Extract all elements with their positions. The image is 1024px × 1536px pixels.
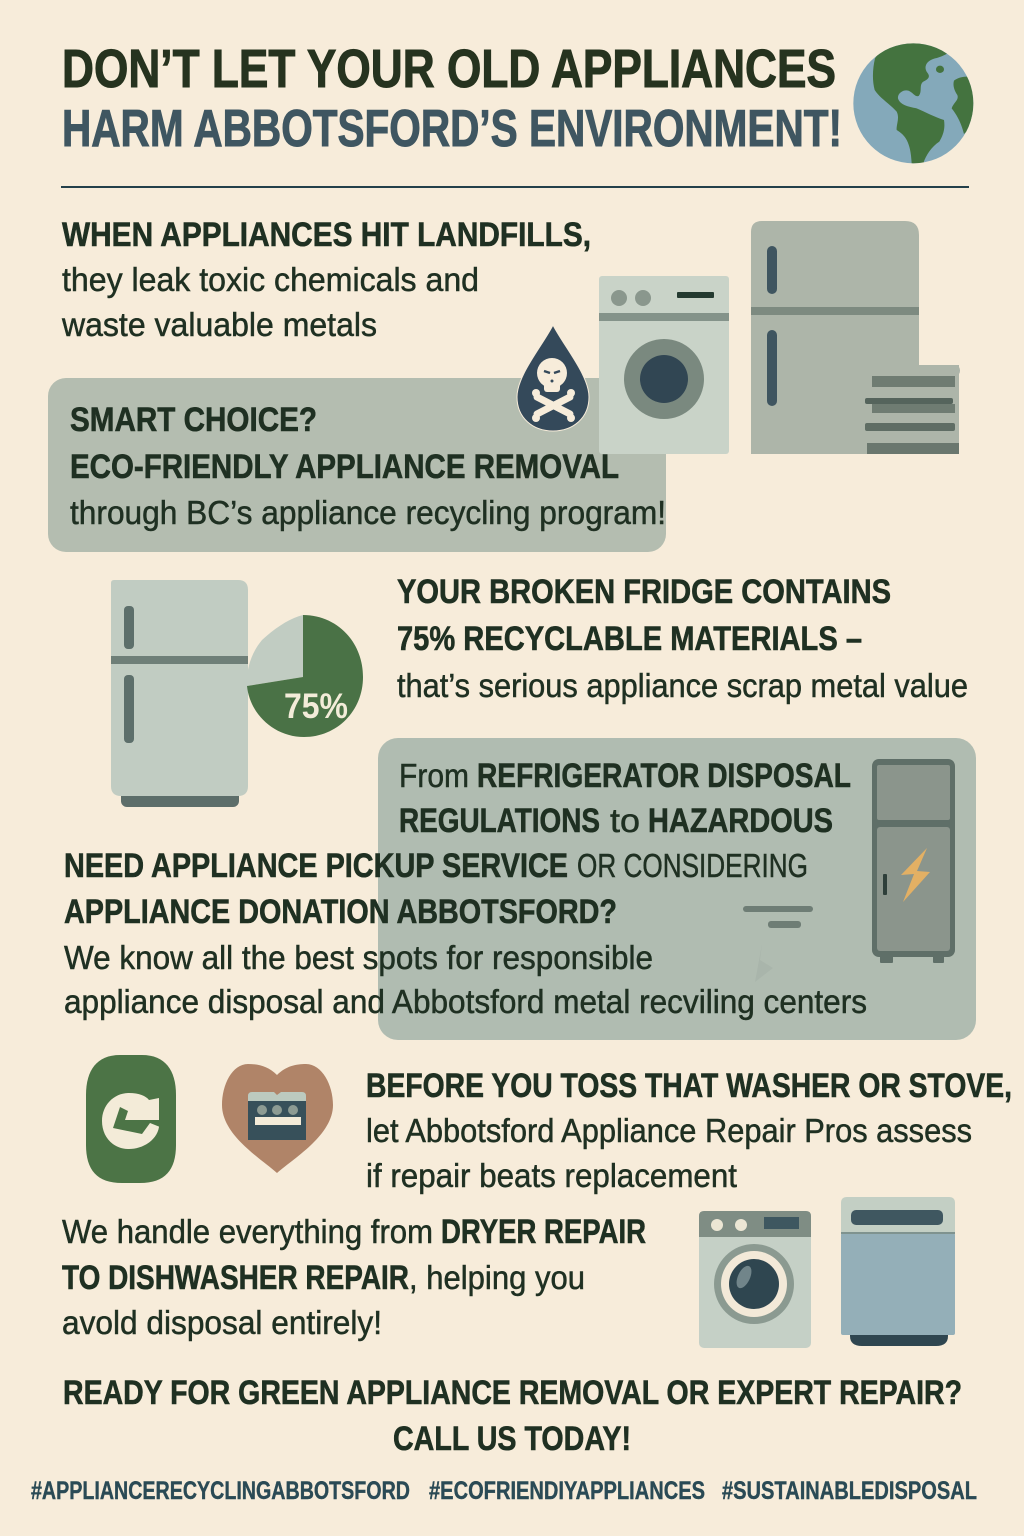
hashtags (31, 1477, 977, 1505)
icon: recycle (86, 1055, 176, 1183)
title: DON’T LET YOUR OLD APPLIANCES (62, 39, 836, 99)
text: we handle everything: avold disposal entirely! (62, 1304, 382, 1341)
call to action (63, 1374, 962, 1458)
text: pickup service: NEED APPLIANCE PICKUP SERVICE (64, 847, 568, 885)
text: smart choice: SMART CHOICE? (70, 401, 317, 439)
chart: 75% pie (247, 615, 363, 737)
divider (61, 186, 969, 188)
text: pickup service: We know all the best spots for responsible (64, 939, 653, 976)
title (62, 39, 842, 158)
text: recyclable materials: that’s serious appliance scrap metal value (397, 667, 968, 704)
hashtags: #ECOFRIENDIYAPPLIANCES (429, 1477, 705, 1505)
icon: fridge with stack of scrap (751, 221, 960, 454)
text: regulations (399, 757, 851, 840)
text: landfills: WHEN APPLIANCES HIT LANDFILLS, (62, 216, 591, 254)
text: landfills: waste valuable metals (61, 306, 377, 343)
text: landfills (61, 216, 591, 343)
icon: washer (599, 276, 729, 454)
text: landfills: they leak toxic chemicals and (62, 261, 479, 298)
icon: dishwasher (841, 1197, 955, 1346)
text: we handle everything: We handle everything from (62, 1213, 433, 1250)
icon: heart with stove (222, 1064, 333, 1173)
text: regulations: REGULATIONS (399, 802, 600, 840)
text: regulations: to (610, 802, 640, 839)
text: we handle everything: DRYER REPAIR (441, 1213, 646, 1251)
icon: toxic drop (517, 325, 589, 431)
text: smart choice (70, 401, 666, 531)
text: smart choice: ECO-FRIENDLY APPLIANCE REMOVAL (70, 448, 619, 486)
call to action: CALL US TODAY! (393, 1420, 631, 1458)
text: recyclable materials (397, 573, 968, 704)
panel: regulations (378, 738, 976, 1040)
text: we handle everything: , helping you (409, 1259, 585, 1296)
text: pickup service: OR CONSIDERING (577, 847, 808, 884)
decoration: ground lines (743, 906, 813, 982)
text: recyclable materials: 75% RECYCLABLE MATERIALS – (397, 620, 862, 658)
icon: hazard fridge (872, 759, 955, 963)
icon: dryer (699, 1211, 811, 1348)
text: we handle everything (62, 1213, 646, 1341)
chart: 75% pie: 75% (284, 687, 348, 726)
icon: globe (853, 37, 980, 163)
hashtags: #APPLIANCERECYCLINGABBOTSFORD (31, 1477, 410, 1505)
text: pickup service (64, 847, 867, 1020)
text: smart choice: through BC’s appliance recycling program! (70, 494, 666, 531)
icon: fridge (111, 580, 248, 807)
text: regulations: From (399, 757, 469, 794)
text: recyclable materials: YOUR BROKEN FRIDGE CONTAINS (397, 573, 891, 611)
text: we handle everything: TO DISHWASHER REPAIR (62, 1259, 409, 1297)
text: pickup service: appliance disposal and Abbotsford metal recviling centers (64, 983, 867, 1020)
text: before you toss (366, 1067, 1012, 1194)
text: before you toss: let Abbotsford Appliance Repair Pros assess (366, 1112, 972, 1149)
text: regulations: HAZARDOUS (648, 802, 833, 840)
panel: smart choice (48, 378, 666, 552)
text: regulations: REFRIGERATOR DISPOSAL (477, 757, 851, 795)
text: pickup service: APPLIANCE DONATION ABBOTSFORD? (64, 893, 617, 931)
text: before you toss: if repair beats replacement (366, 1157, 737, 1194)
